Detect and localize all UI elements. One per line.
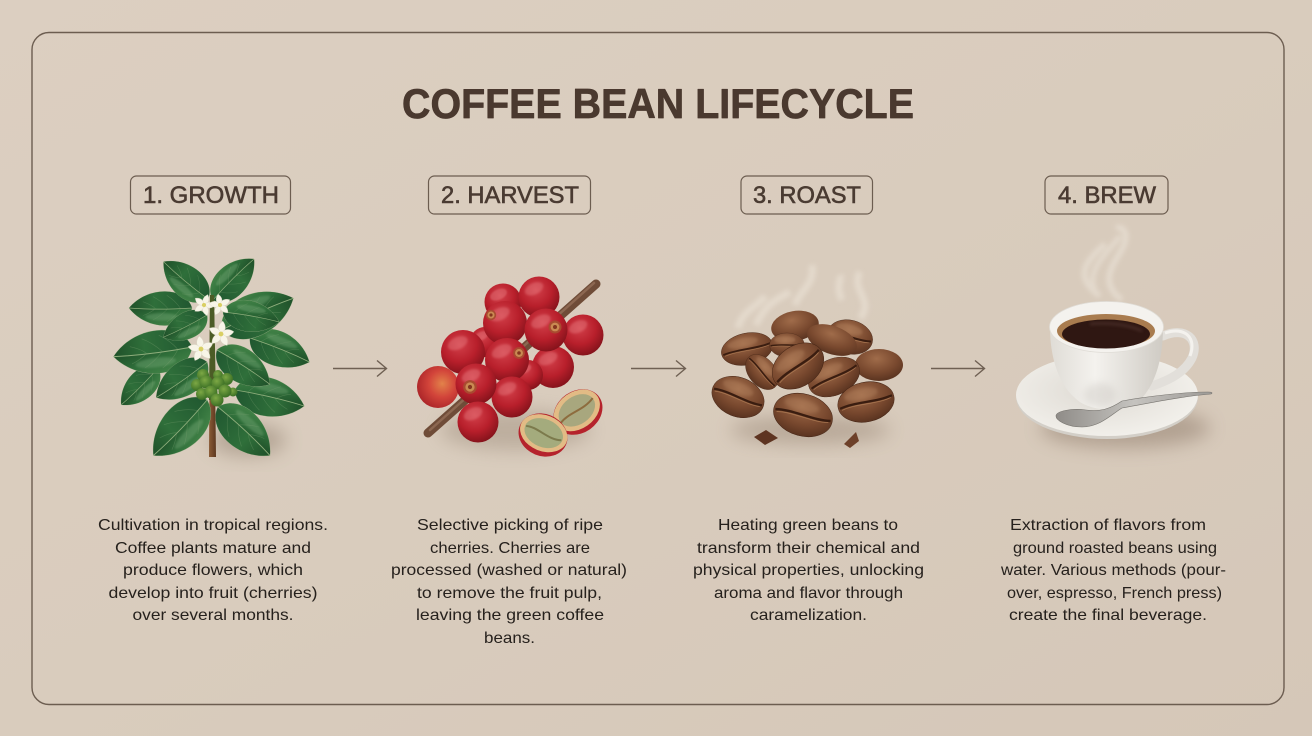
description: growth: develop into fruit (cherries) — [108, 585, 318, 602]
description: growth: Coffee plants mature and — [115, 540, 311, 557]
description: harvest: Selective picking of ripe — [417, 517, 603, 534]
step label: 3. Roast: 3. ROAST — [753, 182, 861, 209]
description: growth: over several months. — [132, 607, 294, 624]
step label: 1. Growth — [130, 176, 290, 214]
arrow: roast to brew — [931, 360, 984, 376]
description: harvest: leaving the green coffee — [416, 607, 604, 624]
step label: 2. Harvest: 2. HARVEST — [441, 182, 579, 209]
icon: coffee cherries — [417, 276, 611, 464]
description: roast: Heating green beans to — [718, 517, 898, 534]
step label: 4. Brew: 4. BREW — [1058, 182, 1156, 209]
description: brew: Extraction of flavors from — [1010, 517, 1206, 534]
description: brew: ground roasted beans using — [1013, 540, 1217, 557]
description: brew: water. Various methods (pour- — [1000, 562, 1226, 579]
arrow: growth to harvest — [333, 360, 386, 376]
description: growth — [98, 517, 328, 624]
description: growth: Cultivation in tropical regions. — [98, 517, 328, 534]
description: harvest: cherries. Cherries are — [430, 540, 590, 557]
icon: coffee cup on saucer with spoon — [1016, 228, 1212, 448]
step label: 1. Growth: 1. GROWTH — [143, 182, 279, 209]
icon: roasted beans with steam — [706, 265, 903, 448]
description: harvest: beans. — [484, 630, 535, 647]
description: roast: transform their chemical and — [697, 540, 920, 557]
arrow: harvest to roast — [631, 360, 686, 376]
description: roast — [693, 517, 924, 624]
icon: coffee plant — [111, 248, 316, 470]
step label: 2. Harvest — [428, 176, 590, 214]
description: brew — [1000, 517, 1226, 624]
description: roast: caramelization. — [750, 607, 867, 624]
description: growth: produce flowers, which — [123, 562, 303, 579]
description: roast: aroma and flavor through — [714, 585, 903, 602]
description: roast: physical properties, unlocking — [693, 562, 924, 579]
description: brew: over, espresso, French press) — [1007, 585, 1222, 602]
description: harvest: to remove the fruit pulp, — [417, 585, 602, 602]
step label: 4. Brew — [1045, 176, 1168, 214]
step label: 3. Roast — [741, 176, 872, 214]
description: brew: create the final beverage. — [1009, 607, 1207, 624]
description: harvest — [391, 517, 627, 647]
title: COFFEE BEAN LIFECYCLE — [402, 80, 914, 127]
description: harvest: processed (washed or natural) — [391, 562, 627, 579]
